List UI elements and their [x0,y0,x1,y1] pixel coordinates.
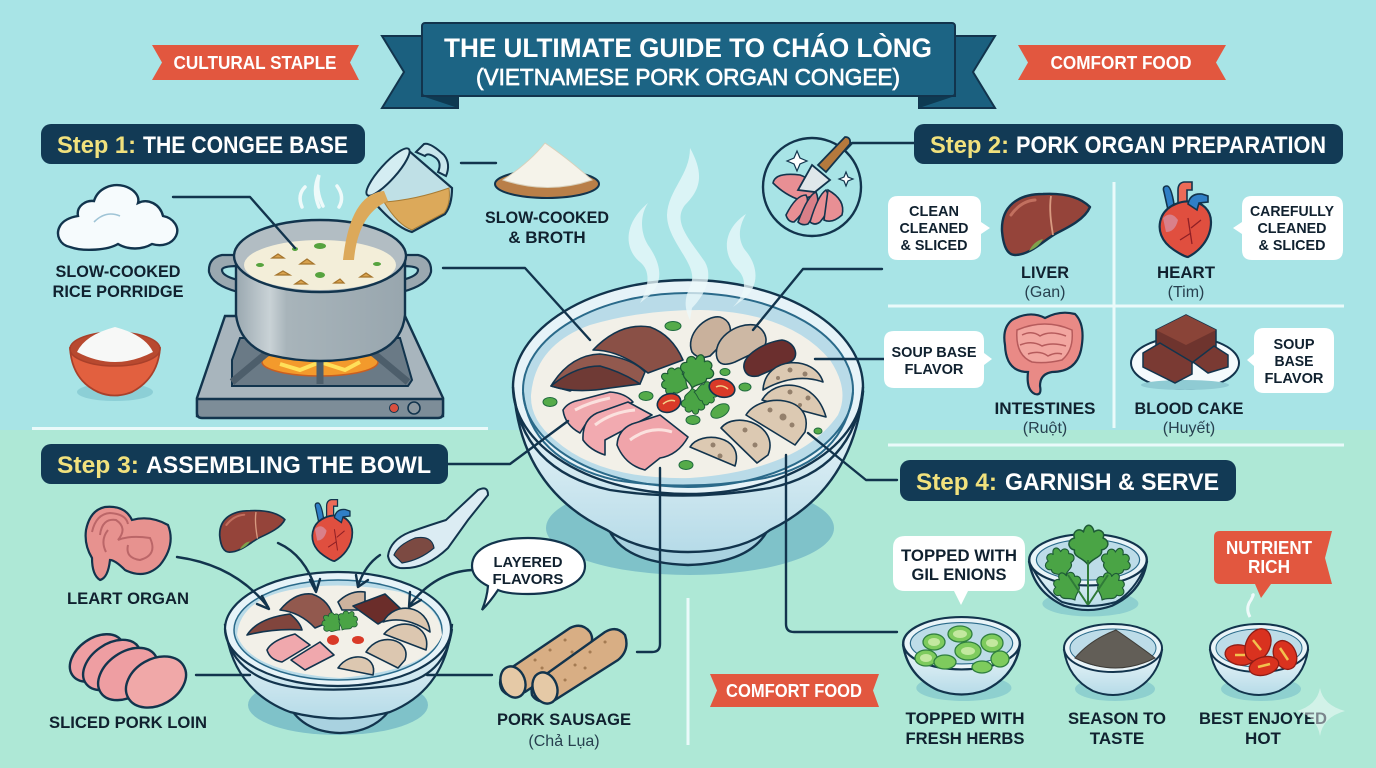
icon: small heart [312,500,352,561]
label: topped with fresh herbs: TOPPED WITH [906,709,1024,728]
icon: pepper bowl [1064,624,1162,701]
icon: rice pile on plate [495,143,599,198]
callout: & SLICED [900,237,968,254]
step 2 heading: Step 2: [930,132,1009,159]
callout: nutrient rich [1214,531,1332,598]
label: (Huyết) [1163,420,1215,437]
label: best enjoyed hot: HOT [1245,729,1282,748]
label: season to taste: SEASON TO [1068,709,1166,728]
callout: CLEAN [909,203,959,220]
callout [1247,328,1334,393]
callout [888,196,990,260]
label: INTESTINES [994,399,1096,418]
callout: layered flavors: FLAVORS [492,571,564,588]
organ quadrant: blood cake [1131,315,1334,437]
icon: cilantro bowl [1029,525,1147,616]
label: LIVER [1021,263,1069,282]
label: pork sausage: PORK SAUSAGE [497,710,631,729]
callout [1233,196,1343,260]
bowl foot [607,525,770,565]
main bowl of chao long [513,280,863,575]
ribbon: comfort food lower [710,674,879,707]
icon: pork sausage logs [496,626,626,707]
pouring pitcher [416,144,448,176]
ribbon: comfort food top [1018,45,1226,80]
pot steam [300,175,342,207]
pot body [236,262,405,361]
organ quadrant: liver [888,194,1090,301]
assembly bowl [225,572,452,735]
label [1134,399,1244,437]
label: pork sausage: (Chả Lụa) [528,733,600,750]
label: (Gan) [1025,284,1065,301]
cilantro garnish [656,350,719,416]
step 3 heading: ASSEMBLING THE BOWL [146,452,431,479]
icon: cloud of porridge [58,185,177,250]
icon: green onion bowl [903,617,1020,701]
green onions [543,322,822,470]
liver slices [551,326,683,391]
label: topped with fresh herbs [906,709,1024,748]
title text: (VIETNAMESE PORK ORGAN CONGEE) [476,64,900,90]
step 3 heading [41,444,448,484]
ribbon: cultural staple: CULTURAL STAPLE [174,53,336,73]
callout: FLAVOR [904,361,964,378]
congee surface [531,310,842,478]
label: topped with fresh herbs: FRESH HERBS [906,729,1024,748]
porridge with toppings [244,240,396,290]
label: slow-cooked rice porridge [52,262,184,301]
step 4 heading [900,460,1236,501]
label: slow-cooked & broth: SLOW-COOKED [485,208,609,227]
assembly bowl side lines [196,674,492,676]
icon: sliced pork loin [61,624,195,718]
sausage rounds [690,363,826,466]
icon: knife slicing organ [763,137,861,236]
label: pork sausage [497,710,631,750]
label: leart organ: LEART ORGAN [67,589,189,608]
label: HEART [1157,263,1216,282]
bowl front rim [513,387,863,496]
step 1 heading: THE CONGEE BASE [143,132,348,159]
label: slow-cooked rice porridge: RICE PORRIDGE [52,282,184,301]
label: slow-cooked & broth [485,208,609,247]
step 2 heading [914,124,1343,164]
callout: FLAVOR [1264,370,1324,387]
label: best enjoyed hot: BEST ENJOYED [1199,709,1327,728]
title text: THE ULTIMATE GUIDE TO CHÁO LÒNG [444,32,932,63]
label: slow-cooked & broth: & BROTH [508,228,586,247]
organ quadrant: intestines [884,313,1096,437]
icon: small liver [220,511,285,552]
callout: SOUP [1274,336,1314,353]
label: sliced pork loin: SLICED PORK LOIN [49,713,207,732]
ribbon: comfort food lower: COMFORT FOOD [726,681,862,701]
organ quadrant: heart [1157,182,1343,301]
callout: nutrient rich: RICH [1248,557,1290,577]
callout: layered flavors: LAYERED [494,554,563,571]
step 4 heading: GARNISH & SERVE [1005,469,1219,496]
label [1157,263,1216,301]
tomato slices [655,376,737,416]
callout: topped with gil enions: TOPPED WITH [901,546,1017,565]
callout: topped with gil enions [893,536,1025,605]
pot handles [209,255,238,292]
cilantro [317,607,364,645]
ribbon: comfort food top: COMFORT FOOD [1050,53,1192,73]
foot [286,700,396,733]
body [225,625,452,718]
icon: pot on stove with broth pouring [197,144,452,418]
callout [884,331,992,388]
icon: spoon with meat [388,488,488,568]
leader lines [173,143,914,652]
title banner [382,23,995,108]
callout: topped with gil enions: GIL ENIONS [912,565,1006,584]
meats [247,592,402,670]
intestine rolls [691,317,796,376]
steam above chili bowl [1248,595,1253,617]
label: (Tim) [1168,284,1204,301]
rim [225,572,451,686]
callout: & SLICED [1258,237,1326,254]
step 1 heading [41,124,365,164]
rim [513,280,863,494]
callout: SOUP BASE [892,344,976,361]
icon: bowl of rice [70,327,160,401]
icon: organ coil [86,507,171,580]
step 3 heading: Step 3: [57,452,139,479]
stove [197,316,443,418]
arrows into assembly bowl [177,543,472,609]
icon: heart [1160,182,1211,257]
icon: blood cake on plate [1131,315,1239,390]
label [1021,263,1069,301]
callout: BASE [1274,353,1314,370]
sausage speckles [710,368,810,458]
decorative sparkle [1297,688,1345,736]
label: season to taste: TASTE [1090,729,1144,748]
icon: intestines [1004,313,1083,394]
shadow [248,675,428,735]
callout: CLEANED [900,220,969,237]
label: slow-cooked rice porridge: SLOW-COOKED [56,262,180,281]
main bowl steam [629,148,756,320]
callout: nutrient rich: NUTRIENT [1226,538,1312,558]
label: (Ruột) [1023,420,1067,437]
callout: CLEANED [1258,220,1327,237]
step 1 heading: Step 1: [57,132,136,159]
icon: liver [1002,194,1090,255]
label [994,399,1096,437]
callout: CAREFULLY [1250,203,1334,220]
pork slices [563,392,688,470]
callout: layered flavors [472,538,585,610]
icon: chili bowl [1210,624,1308,701]
step 4 heading: Step 4: [916,469,997,496]
label: BLOOD CAKE [1134,399,1244,418]
sausage rounds [338,608,430,675]
step 2 heading: PORK ORGAN PREPARATION [1016,132,1326,159]
title text [444,32,932,90]
bowl shadow [546,481,834,575]
label: season to taste [1068,709,1166,748]
label: best enjoyed hot [1199,709,1327,748]
bowl body [514,392,863,552]
ribbon: cultural staple [152,45,359,80]
